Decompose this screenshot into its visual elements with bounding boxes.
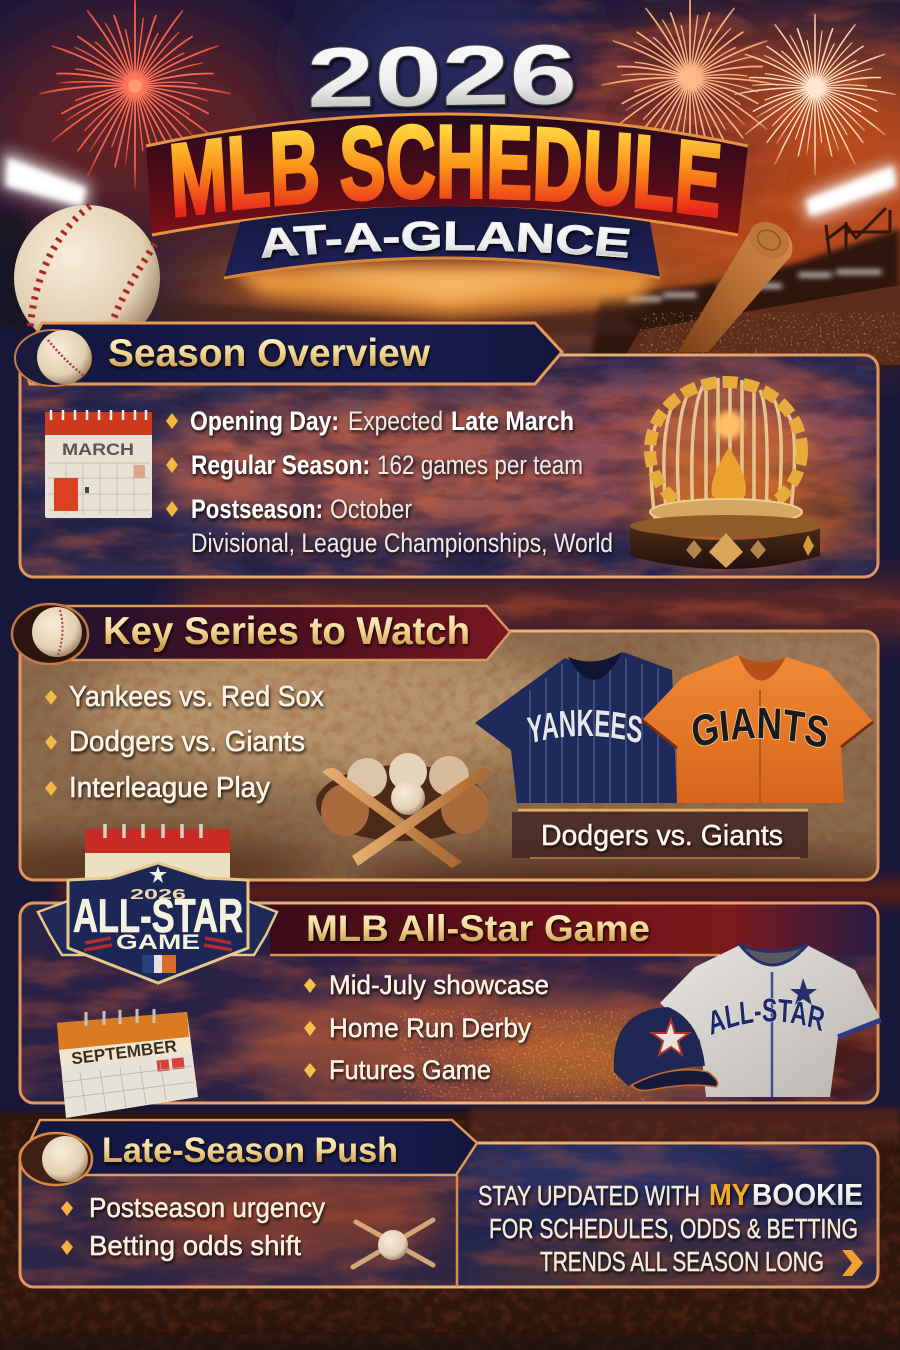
bullets: all-star	[304, 970, 549, 1085]
jersey: Giants	[641, 655, 874, 803]
bat	[678, 215, 796, 352]
badge: 2026 all-star game	[38, 824, 277, 983]
title banner: MLB Schedule	[146, 112, 748, 236]
calendar: March	[45, 410, 152, 518]
icon: small crossed bats	[353, 1220, 433, 1267]
heading: key series: Key Series to Watch	[103, 610, 470, 653]
jersey lettering: GIANTS	[692, 706, 829, 748]
panel: key series	[18, 630, 880, 882]
ribbon: season overview	[15, 323, 562, 386]
stadium stands right with crowd	[590, 228, 900, 365]
calendar: March: MARCH	[62, 440, 134, 459]
jersey lettering: YANKEES	[526, 709, 642, 743]
badge: 2026 all-star game: ALL-STAR	[73, 889, 243, 942]
fireworks right pale	[735, 14, 895, 174]
calendar behind badge	[85, 824, 230, 889]
subtitle text: AT-A-GLANCE	[261, 221, 633, 262]
bullets: all-star: Home Run Derby	[329, 1013, 531, 1043]
ribbon: late-season push	[20, 1120, 477, 1185]
icon: all-star cap	[614, 1007, 718, 1090]
heading: season overview: Season Overview	[108, 332, 431, 375]
bullets: key series: Interleague Play	[69, 772, 270, 804]
bullets: season overview: Postseason:	[191, 494, 323, 524]
title: 2026: 2026	[306, 27, 578, 125]
bullets: season overview: Expected	[348, 406, 443, 436]
bullets: season overview: October	[330, 494, 412, 524]
callout: Dodgers vs. Giants: Dodgers vs. Giants	[541, 820, 783, 852]
icon: baseball	[15, 330, 91, 386]
panel: season overview	[15, 323, 880, 580]
ribbon: key series (top layer)	[12, 604, 510, 664]
bullets: season overview: Late March	[451, 406, 574, 436]
calendar: September: SEPTEMBER	[70, 1037, 178, 1068]
jersey: Yankees	[475, 652, 677, 803]
bullets: season overview: Regular Season:	[191, 450, 370, 480]
bullets: season overview: 162 games per team	[377, 450, 583, 480]
bullets: key series: Dodgers vs. Giants	[69, 726, 305, 758]
bullets: season overview: Divisional, League Championships, World	[191, 528, 613, 558]
bullets: season overview: Opening Day:	[190, 406, 339, 436]
calendar: September	[57, 1009, 198, 1118]
stadium lights left	[0, 150, 92, 330]
heading: late-season push: Late-Season Push	[102, 1131, 398, 1170]
bullets: all-star: Futures Game	[329, 1055, 491, 1085]
title: MLB Schedule text: MLB SCHEDULE	[171, 124, 721, 218]
stadium lights right and tower	[803, 162, 899, 258]
badge: 2026 all-star game: GAME	[116, 931, 200, 954]
callout: stay updated with MyBookie	[478, 1177, 863, 1277]
bullets: key series	[45, 681, 324, 804]
infield glow and crowd band	[160, 268, 660, 335]
jersey: all-star	[660, 942, 882, 1097]
bullets: key series: Yankees vs. Red Sox	[69, 681, 324, 713]
callout: stay updated with MyBookie: BOOKIE	[752, 1177, 863, 1212]
panel: late-season push and call to action	[20, 1120, 878, 1305]
subtitle banner: At-a-Glance	[224, 206, 660, 280]
bullets: late-season: Postseason urgency	[89, 1192, 325, 1223]
bullets: late-season	[61, 1192, 325, 1261]
badge: 2026 all-star game: 2026	[130, 886, 186, 903]
baseball large	[14, 205, 160, 351]
fireworks right peach	[602, 0, 778, 173]
trophy	[630, 378, 822, 569]
icon: crossed bats with balls and glove	[316, 753, 492, 868]
bullets: season overview	[166, 406, 613, 558]
icon: baseball	[20, 1133, 92, 1185]
callout: stay updated with MyBookie: STAY UPDATED WITH	[478, 1180, 700, 1211]
arrow: chevron	[842, 1250, 863, 1276]
callout: Dodgers vs. Giants	[512, 810, 808, 858]
heading: MLB All-Star Game: MLB All-Star Game	[306, 908, 650, 949]
fireworks left red	[40, 0, 230, 189]
icon: baseball	[12, 604, 88, 664]
jersey lettering: ALL-STAR	[710, 998, 824, 1036]
callout: stay updated with MyBookie: MY	[709, 1177, 750, 1212]
bullets: late-season: Betting odds shift	[89, 1230, 301, 1261]
bullets: all-star: Mid-July showcase	[329, 970, 549, 1000]
panel: all-star game	[18, 824, 882, 1118]
